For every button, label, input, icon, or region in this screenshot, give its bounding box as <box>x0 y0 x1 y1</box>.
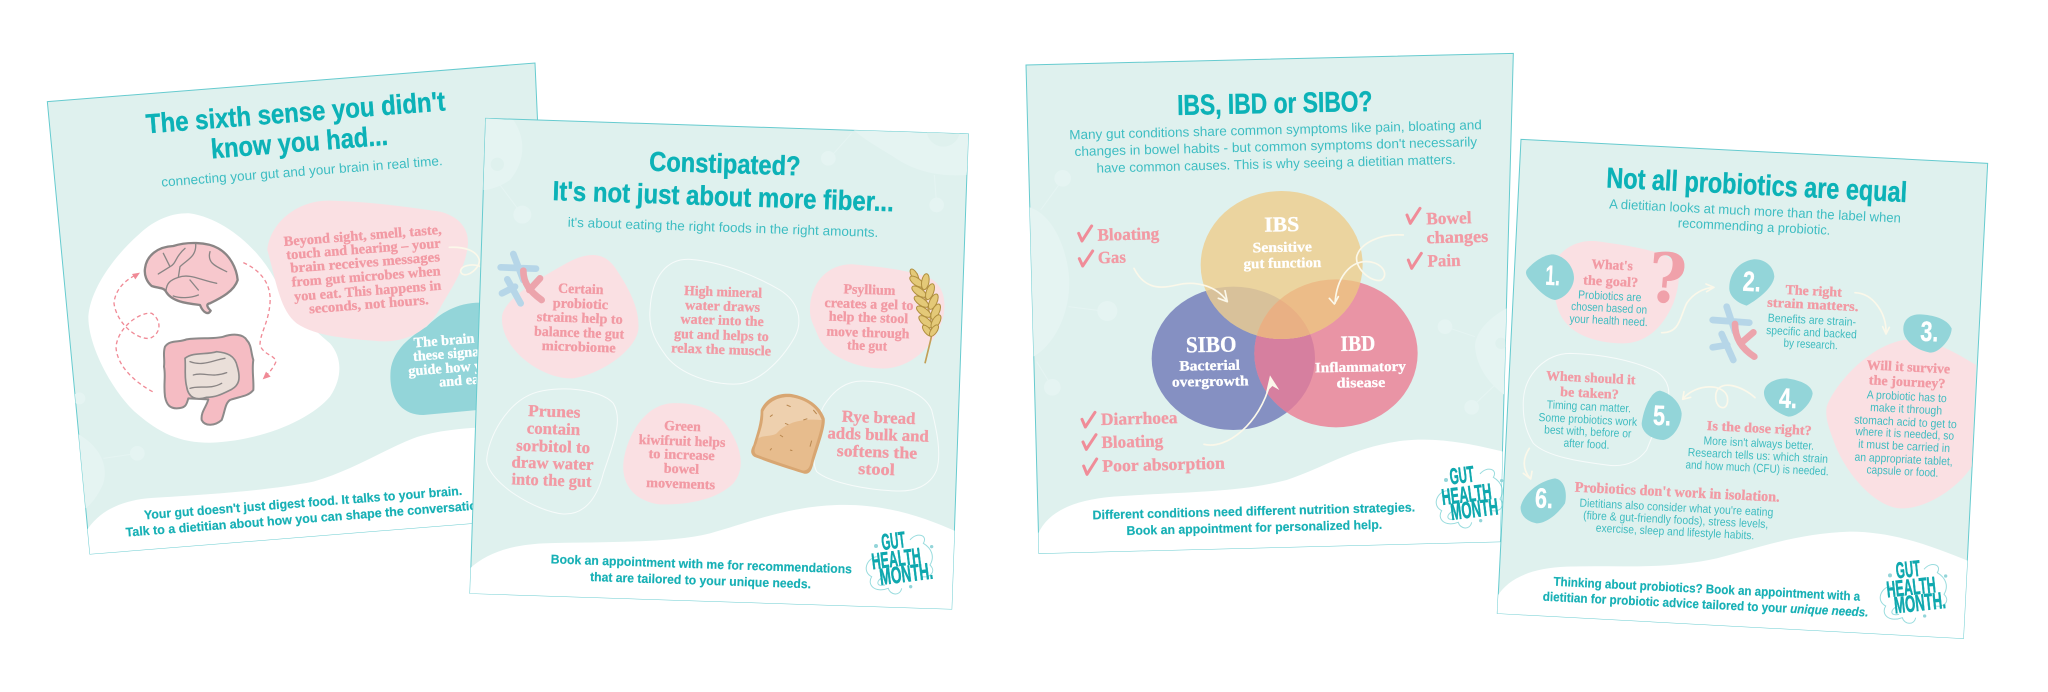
step 1: 1. <box>1545 259 1561 291</box>
blob: probiotic strains: microbiome <box>542 338 616 356</box>
panel: sixth sense card <box>46 62 538 554</box>
step 3: stomach acid to get to <box>1854 413 1957 431</box>
white blob behind illustrations <box>88 213 339 443</box>
venn label: IBS: Sensitive <box>1252 239 1312 256</box>
title: Constipated? <box>649 146 801 181</box>
footer text: Book an appointment with me for recommendations <box>551 552 852 576</box>
title: It's not just about more fiber... <box>552 176 894 217</box>
arrow: dashed brain to gut <box>243 263 276 379</box>
blob: probiotic strains <box>502 255 639 378</box>
subtitle: recommending a probiotic. <box>1678 216 1831 238</box>
subtitle: changes in bowel habits - but common symptoms don't necessarily <box>1074 134 1477 159</box>
blob: psyllium <box>810 264 944 368</box>
blob: psyllium: move through <box>826 324 910 342</box>
blob: rye bread text: softens the <box>837 441 917 462</box>
step 6: Dietitians also consider what you're eating <box>1579 496 1774 519</box>
teal text blob: guide how you feel <box>408 355 522 379</box>
venn diagram <box>1152 191 1418 430</box>
step 2: 2. <box>1742 265 1762 298</box>
blob: rye bread text: stool <box>858 459 895 479</box>
step 1: Probiotics are <box>1578 288 1642 304</box>
venn label: IBS: gut function <box>1243 255 1321 272</box>
panel: probiotics card <box>1493 139 1988 643</box>
step 2: by research. <box>1783 336 1838 352</box>
blob: mineral water: relax the muscle <box>671 340 771 359</box>
step 4: 4. <box>1778 382 1798 414</box>
step 3: make it through <box>1870 401 1942 417</box>
blob: psyllium: help the stool <box>829 309 908 327</box>
footer text: Book an appointment for personalized help. <box>1126 518 1382 538</box>
icon: brain <box>145 243 238 313</box>
step 2: strain matters. <box>1767 294 1859 314</box>
title: Not all probiotics are equal <box>1606 162 1908 208</box>
logo: gut health month: GUT <box>1448 461 1475 489</box>
step 5: 5. <box>1652 399 1672 432</box>
callout: pink speech blob: you eat. This happens in <box>293 278 442 304</box>
blob: probiotic strains: strains help to <box>537 309 623 327</box>
step 1: your health need. <box>1569 312 1648 329</box>
icon: bread slice <box>751 394 825 474</box>
callout: pink speech blob: touch and hearing – your <box>286 236 441 263</box>
step 3: the journey? <box>1869 372 1946 391</box>
blob: kiwifruit: to increase <box>648 446 715 464</box>
logo: gut health month: GUT <box>1895 556 1921 583</box>
checklist: bowel changes, pain: Pain <box>1427 251 1461 271</box>
blob: prunes: draw water <box>511 452 594 474</box>
venn label: IBD <box>1315 331 1406 391</box>
footer text: Thinking about probiotics? Book an appointment with a <box>1553 575 1861 604</box>
teal text blob: and eat. <box>438 371 488 390</box>
checklist: diarrhoea, bloating, poor absorption <box>1082 408 1225 476</box>
blob: mineral water: water into the <box>680 311 764 329</box>
step 3: it must be carried in <box>1858 437 1950 455</box>
subtitle: have common causes. This is why seeing a dietitian matters. <box>1096 152 1456 176</box>
logo: gut health month <box>1436 461 1503 528</box>
subtitle: it's about eating the right foods in the right amounts. <box>568 215 879 240</box>
step 6: (fibre & gut-friendly foods), stress levels, <box>1583 509 1769 531</box>
step 1: the goal? <box>1583 272 1639 290</box>
step 2: The right <box>1785 282 1842 300</box>
blob: probiotic strains: balance the gut <box>534 324 624 342</box>
teal text blob: these signals to <box>412 342 505 364</box>
callout: pink speech blob: brain receives messages <box>290 249 440 276</box>
teal text blob: The brain uses <box>413 328 504 351</box>
blob: kiwifruit: movements <box>646 475 715 493</box>
logo: gut health month: MONTH. <box>878 558 934 590</box>
venn label: SIBO <box>1172 331 1249 390</box>
venn label: SIBO: SIBO <box>1186 331 1237 357</box>
subtitle: connecting your gut and your brain in real time. <box>161 153 443 190</box>
blob: psyllium: the gut <box>847 337 887 354</box>
step 3: Will it survive <box>1867 357 1950 376</box>
icon: wheat <box>908 268 943 363</box>
blob: probiotic strains: probiotic <box>553 295 608 312</box>
footer text: that are tailored to your unique needs. <box>590 570 811 591</box>
step 2: Benefits are strain- <box>1768 311 1856 329</box>
footer text: Talk to a dietitian about how you can shape the conversation. <box>125 498 488 540</box>
step 4: More isn't always better. <box>1703 434 1814 452</box>
blob: psyllium: Psyllium <box>843 281 896 298</box>
step 2: specific and backed <box>1766 324 1857 341</box>
logo: gut health month: HEALTH <box>1440 479 1493 510</box>
footer text: Your gut doesn't just digest food. It talks to your brain. <box>143 484 463 522</box>
blob: prunes: Prunes <box>528 401 581 421</box>
footer text: Different conditions need different nutrition strategies. <box>1092 500 1415 522</box>
blob: mineral water <box>650 259 799 384</box>
logo: gut health month: HEALTH <box>1885 572 1937 602</box>
footer text <box>1092 500 1415 538</box>
step 1 <box>1526 237 1690 343</box>
logo: gut health month: MONTH <box>1449 493 1500 525</box>
blob: probiotic strains: Certain <box>558 281 604 297</box>
step 6: 6. <box>1534 482 1554 514</box>
blob: prunes <box>487 389 617 514</box>
title <box>145 86 446 164</box>
blob: mineral water: gut and helps to <box>674 326 769 344</box>
blob: rye bread text: adds bulk and <box>827 423 929 445</box>
footer text <box>1543 575 1869 620</box>
blob: prunes: into the gut <box>511 469 592 491</box>
checklist: bloating, gas: Gas <box>1098 248 1126 267</box>
venn label: IBD: disease <box>1336 374 1385 391</box>
blob: prunes: sorbitol to <box>516 436 590 457</box>
checklist: bowel changes, pain: Bowel <box>1426 208 1472 228</box>
step 3: A probiotic has to <box>1867 388 1947 405</box>
subtitle: Many gut conditions share common symptoms like pain, bloating and <box>1069 118 1482 142</box>
blob: rye bread text <box>814 381 939 491</box>
step 3: where it is needed, so <box>1855 425 1954 442</box>
step 2 <box>1729 259 1859 352</box>
venn label: IBS <box>1243 212 1321 272</box>
blob: prunes: contain <box>527 418 581 439</box>
step 3: 3. <box>1920 315 1939 348</box>
icon: intestine <box>164 335 253 425</box>
footer text: dietitian for probiotic advice tailored to your unique needs. <box>1543 590 1869 620</box>
arrow: step 5 to 6 <box>1523 448 1532 479</box>
arrow: step 4 to 5 <box>1683 385 1755 408</box>
step 6: exercise, sleep and lifestyle habits. <box>1596 521 1755 542</box>
title: know you had... <box>210 120 389 164</box>
logo: gut health month: MONTH. <box>1893 587 1947 618</box>
arrow: to IBS and IBD overlap <box>1329 235 1403 304</box>
subtitle: A dietitian looks at much more than the label when <box>1609 197 1901 226</box>
title: IBS, IBD or SIBO? <box>1177 85 1373 121</box>
blob: kiwifruit: kiwifruit helps <box>639 432 726 450</box>
step 1: What's <box>1591 256 1633 273</box>
panel: IBS IBD SIBO card <box>1026 53 1517 557</box>
title <box>552 146 894 217</box>
step 4: and how much (CFU) is needed. <box>1685 458 1829 478</box>
checklist: bowel changes, pain <box>1407 208 1488 271</box>
step 5: be taken? <box>1560 384 1619 402</box>
logo: gut health month: GUT <box>880 527 907 555</box>
arrow: step 2 to 3 <box>1855 293 1889 334</box>
step 5: best with, before or <box>1544 423 1632 440</box>
step 5: Timing can matter. <box>1547 398 1631 415</box>
step 3 <box>1826 314 1976 508</box>
venn label: IBD: IBD <box>1340 331 1375 356</box>
venn label: IBS: IBS <box>1264 212 1299 236</box>
step 6 <box>1521 478 1780 542</box>
blob: rye bread text: Rye bread <box>842 407 916 428</box>
step 5: after food. <box>1563 436 1610 452</box>
arrow: curl from speech blob <box>449 247 481 275</box>
icon: bacteria <box>1713 307 1754 360</box>
step 5 <box>1523 353 1682 466</box>
step 4: Research tells us: which strain <box>1688 446 1828 466</box>
arrow: dashed gut to brain <box>114 273 159 392</box>
checklist: bowel changes, pain: changes <box>1426 227 1488 247</box>
logo: gut health month <box>866 527 934 594</box>
blob: kiwifruit: bowel <box>664 461 699 477</box>
checklist: bloating, gas: Bloating <box>1097 224 1159 245</box>
blob: psyllium: creates a gel to <box>824 295 914 313</box>
checklist: diarrhoea, bloating, poor absorption: Diarrhoea <box>1101 408 1178 429</box>
subtitle <box>1069 118 1482 176</box>
venn label: SIBO: overgrowth <box>1172 373 1249 390</box>
step 3: capsule or food. <box>1866 463 1939 480</box>
step 4: Is the dose right? <box>1707 418 1812 438</box>
arrow: to IBS and SIBO overlap <box>1134 268 1227 302</box>
icon: bacteria <box>501 254 542 303</box>
step 4 <box>1685 378 1829 478</box>
teal text blob <box>390 303 522 415</box>
step 3: an appropriate tablet, <box>1854 450 1953 468</box>
step 1: chosen based on <box>1571 300 1647 316</box>
step 6: Probiotics don't work in isolation. <box>1575 479 1780 505</box>
callout: pink speech blob: Beyond sight, smell, taste, <box>283 222 442 249</box>
checklist: diarrhoea, bloating, poor absorption: Bloating <box>1101 431 1163 452</box>
footer text <box>551 552 852 591</box>
arrow: to SIBO and IBD overlap <box>1204 375 1279 445</box>
step 5: Some probiotics work <box>1538 411 1638 428</box>
title: The sixth sense you didn't <box>145 86 446 139</box>
checklist: bloating, gas <box>1079 224 1159 267</box>
venn label: IBD: Inflammatory <box>1315 358 1406 376</box>
blob: kiwifruit: Green <box>664 418 701 435</box>
blob: mineral water: High mineral <box>684 283 762 301</box>
blob: mineral water: water draws <box>685 297 760 315</box>
logo: gut health month <box>1880 556 1947 623</box>
checklist: diarrhoea, bloating, poor absorption: Poor absorption <box>1102 454 1225 476</box>
step 5: When should it <box>1546 368 1636 387</box>
callout: pink speech blob: from gut microbes when <box>291 263 441 290</box>
blob: kiwifruit <box>623 403 741 504</box>
arrow: step 1 to 2 <box>1662 284 1714 333</box>
callout: pink speech blob <box>267 201 468 341</box>
logo: gut health month: HEALTH <box>870 543 922 574</box>
panel: constipation card <box>470 113 970 613</box>
step 1: ? <box>1645 237 1690 320</box>
venn label: SIBO: Bacterial <box>1179 357 1240 374</box>
callout: pink speech blob: seconds, not hours. <box>308 292 429 317</box>
